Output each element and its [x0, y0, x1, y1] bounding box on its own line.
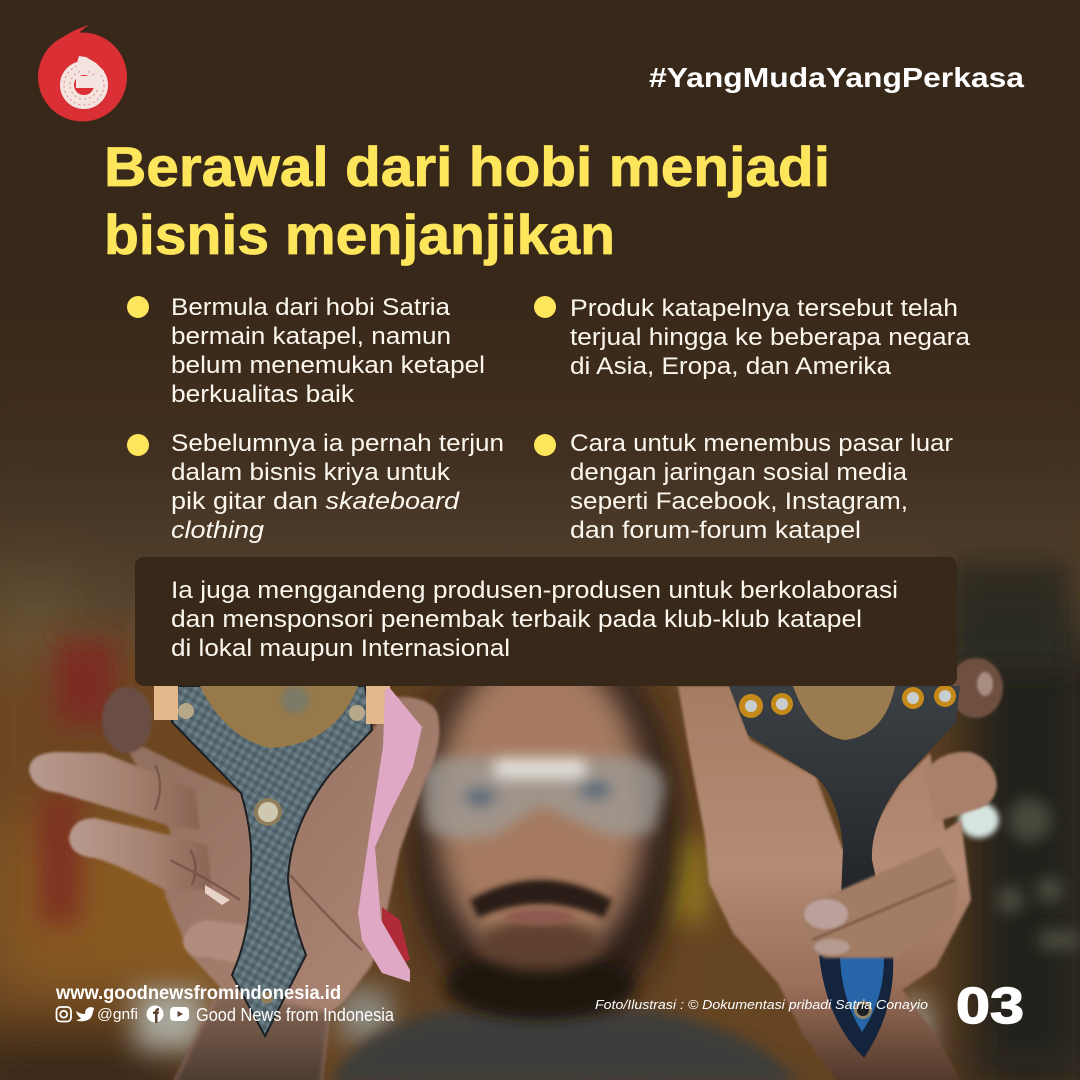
bullet: previous business: pik gitar dan skateboard — [171, 488, 460, 515]
callout box: dan mensponsori penembak terbaik pada klub-klub katapel — [171, 606, 862, 633]
left palm and wrist — [120, 697, 439, 1080]
bullet: social media: dengan jaringan sosial media — [570, 459, 908, 486]
callout box: di lokal maupun Internasional — [171, 635, 510, 662]
index finger — [29, 752, 200, 830]
title: bisnis menjanjikan — [104, 203, 615, 266]
social handles — [56, 1005, 395, 1025]
bullet: social media: dan forum-forum katapel — [570, 517, 861, 544]
middle finger — [69, 818, 212, 890]
bullet: hobby origin — [127, 294, 485, 408]
title: Berawal dari hobi menjadi — [104, 135, 830, 198]
bullet: hobby origin: belum menemukan ketapel — [171, 352, 485, 379]
dark fade overlay at top — [0, 0, 1080, 640]
bullet: export markets: di Asia, Eropa, dan Amerika — [570, 353, 892, 380]
page number: 03 — [956, 977, 1024, 1034]
callout box: Ia juga menggandeng produsen-produsen untuk berkolaborasi — [171, 577, 898, 604]
hashtag: #YangMudaYangPerkasa — [649, 62, 1024, 93]
bullet: export markets: terjual hingga ke beberapa negara — [570, 324, 971, 351]
upper right finger — [925, 752, 997, 822]
bullet: export markets: Produk katapelnya tersebut telah — [570, 295, 958, 322]
photo: right hand holding slingshot — [678, 658, 1003, 1080]
icon: twitter — [76, 1007, 94, 1021]
photo: blurred man with safety glasses — [330, 630, 800, 1080]
icon: facebook — [146, 1006, 164, 1023]
palm highlight — [205, 885, 230, 905]
bullet: social media: seperti Facebook, Instagram, — [570, 488, 908, 515]
bullet: export markets — [534, 295, 971, 380]
channel name: Good News from Indonesia — [196, 1005, 395, 1025]
bullet: previous business: dalam bisnis kriya untuk — [171, 459, 451, 486]
little finger — [183, 920, 245, 965]
website url: www.goodnewsfromindonesia.id — [55, 983, 341, 1004]
top finger — [949, 658, 1003, 718]
bullet: hobby origin: berkualitas baik — [171, 381, 355, 408]
fingernail — [977, 672, 993, 696]
photo: pink rubber band — [358, 687, 422, 982]
photo: dark slingshot with blue handle — [729, 685, 960, 1058]
palm and wrist — [678, 686, 971, 1080]
title — [104, 135, 830, 266]
bullet: hobby origin: Bermula dari hobi Satria — [171, 294, 451, 321]
callout box — [135, 557, 957, 686]
wrist shading — [172, 990, 330, 1080]
bullet: social media: Cara untuk menembus pasar luar — [570, 430, 953, 457]
photo: left hand holding slingshot — [29, 687, 439, 1080]
handle text: @gnfi — [97, 1006, 138, 1023]
photo: bright lamp highlight — [959, 802, 999, 838]
bullet: previous business: Sebelumnya ia pernah terjun — [171, 430, 504, 457]
logo — [38, 25, 127, 122]
icon: youtube — [170, 1007, 189, 1021]
palm creases — [155, 765, 362, 950]
icon: instagram — [56, 1007, 71, 1022]
photo: fingers across right slingshot — [802, 847, 958, 958]
photo credit: Foto/Ilustrasi : © Dokumentasi pribadi Satria Conayio — [595, 997, 928, 1012]
top finger — [102, 687, 152, 753]
bullet: social media — [534, 430, 953, 544]
bullet: hobby origin: bermain katapel, namun — [171, 323, 451, 350]
bullet: previous business: clothing — [171, 517, 265, 544]
bullet: previous business — [127, 430, 504, 544]
photo: carbon fibre slingshot — [154, 686, 390, 1036]
